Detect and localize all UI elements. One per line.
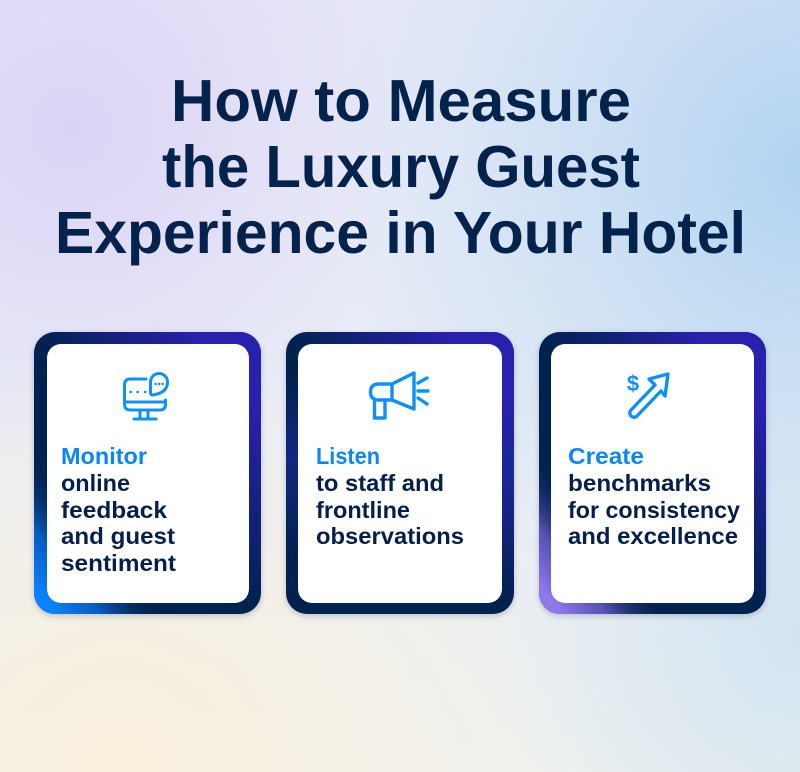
icon: dollar and rising arrow [627,371,668,417]
card text: create: benchmarks [568,470,711,496]
title [55,68,746,266]
icon: computer with speech bubble [124,374,168,419]
card text: listen: Listen [316,443,380,469]
card text: monitor: Monitor [61,443,147,469]
panel: monitor [34,332,261,614]
card text: create [568,443,740,549]
icon: dollar and rising arrow: $ [627,371,639,396]
card text: listen: frontline [316,497,410,523]
card text: monitor: and guest [61,523,175,549]
card text: listen: observations [316,523,464,549]
title: the Luxury Guest [162,134,640,200]
card text: monitor [61,443,176,576]
title: Experience in Your Hotel [55,200,746,266]
panel: listen [286,332,514,614]
card text: create: and excellence [568,523,738,549]
card text: listen: to staff and [316,470,444,496]
icon: megaphone [370,373,428,418]
card text: monitor: feedback [61,497,167,523]
card text: create: Create [568,443,644,469]
card text: create: for consistency [568,497,740,523]
title: How to Measure [171,68,631,134]
card text: monitor: sentiment [61,550,176,576]
card text: listen [316,443,464,549]
panel: create [539,332,766,614]
card text: monitor: online [61,470,130,496]
